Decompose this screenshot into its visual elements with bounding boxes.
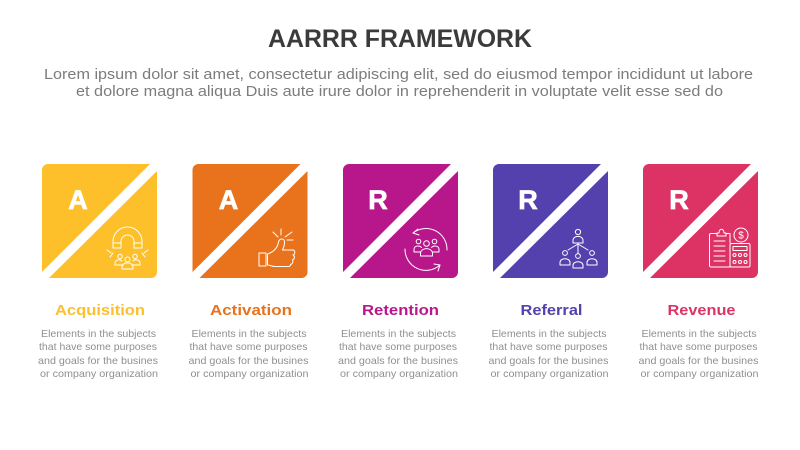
card: referral: R bbox=[518, 185, 538, 215]
description: retention: that have some purposes bbox=[339, 342, 457, 353]
card: retention bbox=[343, 164, 458, 278]
description: referral: and goals for the busines bbox=[488, 356, 608, 367]
description: acquisition: Elements in the subjects bbox=[41, 329, 156, 340]
panel: referral bbox=[488, 164, 609, 380]
description: acquisition: or company organization bbox=[40, 369, 158, 380]
description: revenue: that have some purposes bbox=[640, 342, 758, 353]
description: revenue: and goals for the busines bbox=[638, 356, 758, 367]
panel: retention bbox=[338, 164, 458, 380]
heading: retention: Retention bbox=[362, 302, 439, 319]
card: revenue: $ bbox=[738, 230, 744, 242]
description: retention: Elements in the subjects bbox=[341, 329, 456, 340]
description: activation: Elements in the subjects bbox=[192, 329, 306, 340]
description: referral: or company organization bbox=[490, 369, 609, 380]
description: acquisition bbox=[38, 329, 158, 380]
icon: clipboard and calculator bbox=[710, 228, 750, 267]
description: activation bbox=[188, 329, 309, 380]
description: referral: that have some purposes bbox=[490, 342, 608, 353]
card: activation bbox=[192, 164, 308, 278]
description: revenue bbox=[638, 329, 759, 380]
description: revenue: Elements in the subjects bbox=[642, 329, 756, 340]
description: referral bbox=[488, 329, 609, 380]
description: acquisition: and goals for the busines bbox=[38, 356, 158, 367]
description: revenue: or company organization bbox=[640, 369, 759, 380]
panel: activation bbox=[188, 164, 309, 380]
icon: referral network bbox=[560, 229, 597, 268]
description: retention: or company organization bbox=[340, 369, 458, 380]
description: retention: and goals for the busines bbox=[338, 356, 458, 367]
icon: retention cycle with people bbox=[405, 228, 447, 271]
description: activation: and goals for the busines bbox=[188, 356, 308, 367]
card: referral bbox=[493, 164, 608, 278]
description: acquisition: that have some purposes bbox=[39, 342, 157, 353]
description: retention bbox=[338, 329, 458, 380]
card: activation: A bbox=[219, 185, 238, 215]
icon: thumbs up bbox=[259, 229, 295, 266]
description: activation: that have some purposes bbox=[190, 342, 308, 353]
subtitle text bbox=[44, 66, 753, 100]
card: acquisition bbox=[42, 164, 157, 278]
card: revenue: R bbox=[669, 185, 689, 215]
description: referral: Elements in the subjects bbox=[492, 329, 606, 340]
card: revenue bbox=[643, 164, 758, 278]
subtitle text: et dolore magna aliqua Duis aute irure dolor in reprehenderit in voluptate velit esse sed do bbox=[76, 83, 723, 100]
heading: referral: Referral bbox=[520, 302, 582, 319]
heading: acquisition: Acquisition bbox=[55, 302, 145, 319]
panel: revenue bbox=[638, 164, 759, 380]
subtitle text: Lorem ipsum dolor sit amet, consectetur adipiscing elit, sed do eiusmod tempor incididunt ut labore bbox=[44, 66, 753, 83]
description: activation: or company organization bbox=[190, 369, 309, 380]
heading: revenue: Revenue bbox=[668, 302, 736, 319]
card: retention: R bbox=[368, 185, 388, 215]
heading: activation: Activation bbox=[210, 302, 292, 319]
card: acquisition: A bbox=[68, 185, 88, 215]
panel: acquisition bbox=[38, 164, 158, 380]
title: AARRR FRAMEWORK bbox=[268, 25, 532, 53]
icon: magnet attracting people bbox=[107, 227, 148, 269]
